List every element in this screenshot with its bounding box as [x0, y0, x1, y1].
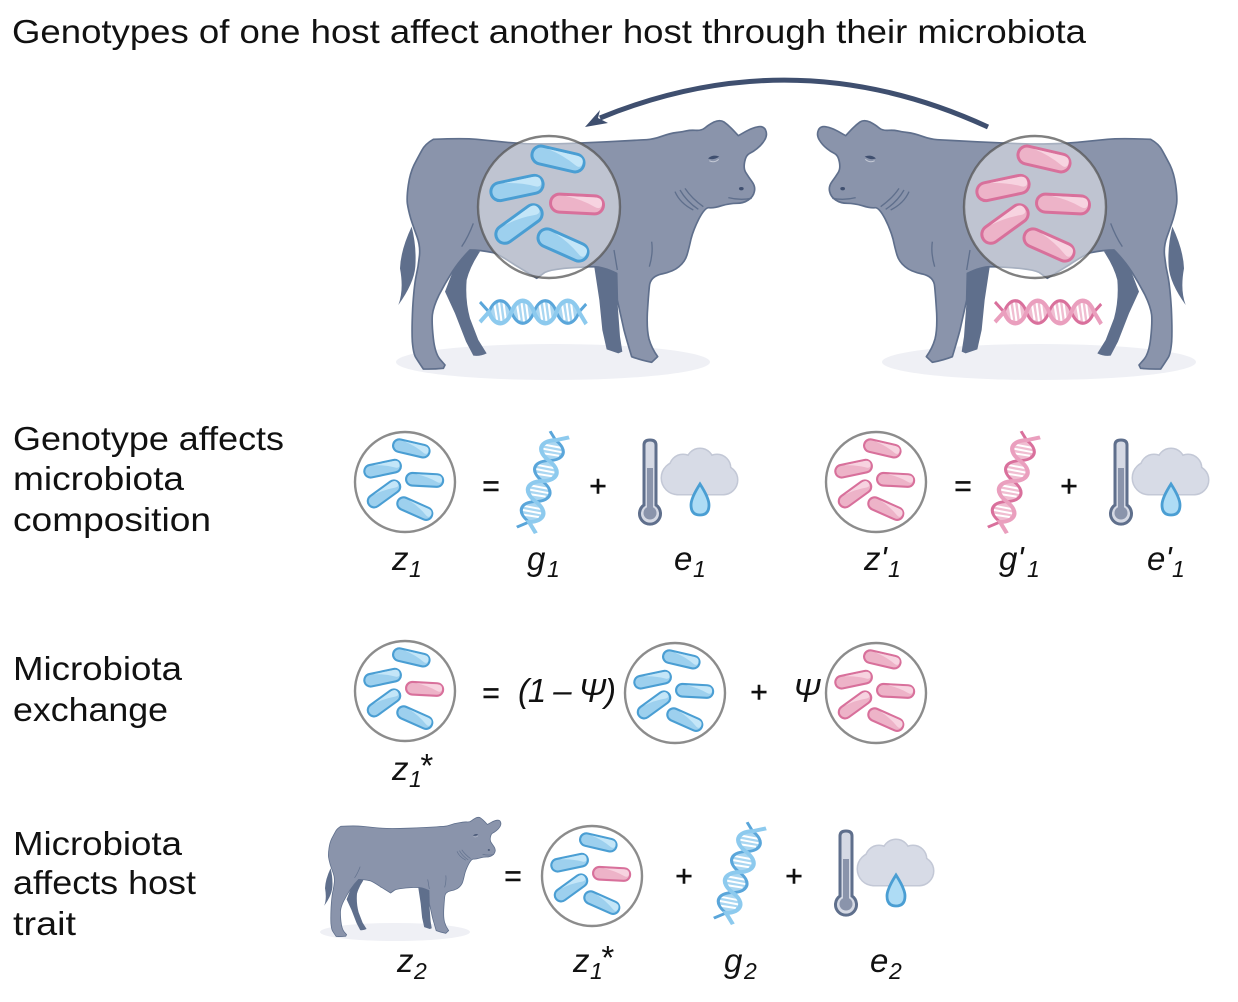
heading: microbiota exchange	[13, 650, 183, 728]
label g'1: 1	[1027, 556, 1040, 582]
mixed microbiota circle z1*	[542, 826, 642, 926]
plus: +	[785, 860, 803, 893]
heading: microbiota exchange: exchange	[13, 691, 168, 728]
plus: +	[675, 860, 693, 893]
equals: =	[482, 470, 500, 503]
label z2: z	[396, 942, 414, 979]
label g'1: g'	[999, 540, 1025, 577]
label z1*	[391, 747, 433, 792]
pink DNA helix	[995, 301, 1101, 324]
pink microbiota circle	[826, 643, 926, 743]
magnified microbiota circle	[964, 136, 1106, 278]
DNA g2	[713, 821, 766, 925]
DNA g1	[516, 430, 569, 534]
plus: +	[1060, 470, 1078, 503]
label z1*	[572, 939, 614, 984]
equals: =	[482, 677, 500, 710]
equals: =	[504, 860, 522, 893]
label z1*: *	[419, 747, 433, 784]
thermometer and rain cloud e'1	[1110, 440, 1208, 524]
title: Genotypes of one host affect another host through their microbiota	[12, 13, 1087, 50]
label e2: e	[870, 942, 888, 979]
equation row: genotype and environment for host 1	[355, 430, 737, 582]
equals: =	[954, 470, 972, 503]
heading: genotype affects microbiota composition: composition	[13, 501, 211, 538]
label z1: z	[391, 540, 409, 577]
label z'1: z'	[863, 540, 888, 577]
one minus psi: (1 – Ψ)	[518, 672, 616, 709]
label z1*: z	[572, 942, 590, 979]
heading: genotype affects microbiota composition: microbiota	[13, 460, 185, 497]
label z1: 1	[409, 556, 422, 582]
psi: Ψ	[793, 672, 821, 709]
heading: microbiota exchange: Microbiota	[13, 650, 183, 687]
label z2: 2	[413, 958, 427, 984]
label g2	[724, 942, 757, 984]
label z'1: 1	[888, 556, 901, 582]
label e'1	[1147, 540, 1185, 582]
ground shadow	[396, 344, 710, 380]
small cow z2	[320, 817, 501, 941]
panel: left host cow	[396, 121, 766, 380]
heading: microbiota affects host trait: Microbiota	[13, 825, 183, 862]
blue DNA helix	[480, 301, 586, 324]
label z'1	[863, 540, 901, 582]
label e2: 2	[888, 958, 902, 984]
arrow: microbiota transfer between hosts	[585, 80, 988, 127]
thermometer and rain cloud e2	[836, 831, 933, 915]
equation row: host trait	[320, 817, 933, 984]
label e1: 1	[693, 556, 706, 582]
equation row: genotype and environment for host 1 prime	[826, 430, 1208, 582]
heading: genotype affects microbiota composition	[13, 420, 284, 538]
label g'1	[999, 540, 1040, 582]
label z1	[391, 540, 422, 582]
heading: genotype affects microbiota composition: Genotype affects	[13, 420, 284, 457]
label g1	[527, 540, 560, 582]
label e1	[674, 540, 706, 582]
thermometer and rain cloud e1	[640, 440, 737, 524]
microbiota circle z'1	[826, 432, 926, 532]
cow illustration mirrored	[818, 121, 1186, 369]
microbiota circle z1	[355, 432, 455, 532]
label z1*: 1	[409, 766, 422, 792]
label e2	[870, 942, 902, 984]
label e1: e	[674, 540, 692, 577]
plus: +	[589, 470, 607, 503]
label z1*: 1	[590, 958, 603, 984]
label g2: g	[724, 942, 743, 979]
heading: microbiota affects host trait	[13, 825, 196, 942]
blue microbiota circle	[625, 643, 725, 743]
ground shadow	[882, 344, 1196, 380]
label e'1: e'	[1147, 540, 1173, 577]
label z1*: *	[600, 939, 614, 976]
equation row: microbiota exchange	[355, 641, 926, 792]
label g1: 1	[547, 556, 560, 582]
label z1*: z	[391, 750, 409, 787]
DNA g'1	[987, 430, 1040, 534]
heading: microbiota affects host trait: trait	[13, 905, 76, 942]
magnified microbiota circle	[478, 136, 620, 278]
panel: right host cow	[818, 121, 1196, 380]
label g2: 2	[743, 958, 757, 984]
label z2	[396, 942, 427, 984]
plus: +	[750, 676, 768, 709]
cow illustration	[398, 121, 766, 369]
mixed microbiota circle z1*	[355, 641, 455, 741]
heading: microbiota affects host trait: affects host	[13, 864, 196, 901]
label g1: g	[527, 540, 546, 577]
label e'1: 1	[1172, 556, 1185, 582]
